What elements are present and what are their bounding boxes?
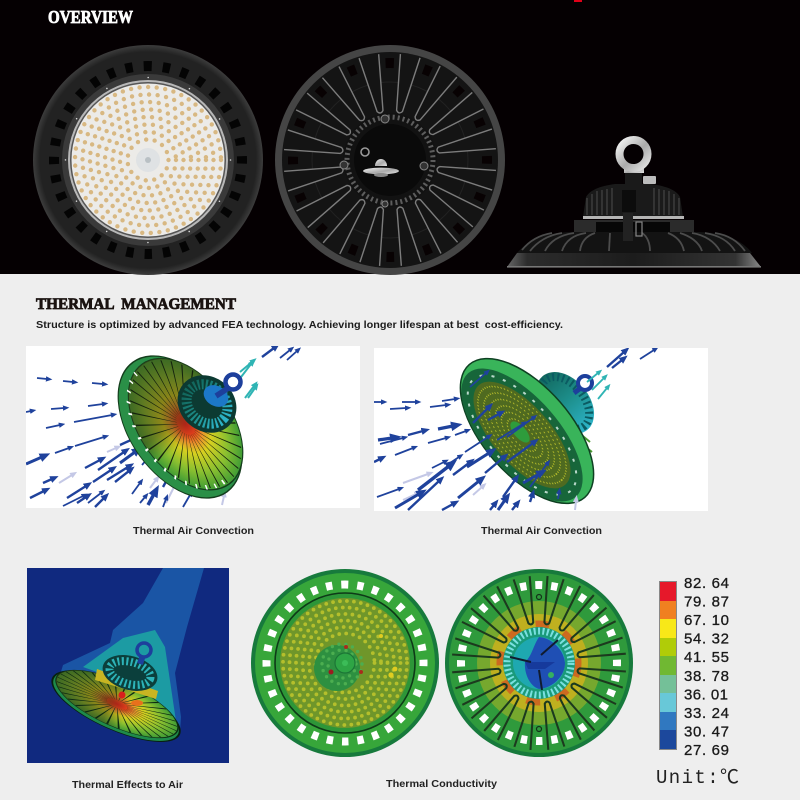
caption: thermal conductivity: Thermal Conductivity — [386, 778, 497, 790]
product photo: lamp side view with lifting ring — [507, 140, 761, 268]
legend values: 30. 47 — [684, 724, 729, 740]
legend values: 38. 78 — [684, 668, 729, 685]
panel: black overview band — [0, 0, 800, 274]
panel: thermal air convection, underside — [374, 348, 708, 511]
legend values: 54. 32 — [684, 630, 729, 648]
text block: thermal management description: Structure is optimized by advanced FEA technology. Achieving longer lifespan at best cost-efficiency. — [36, 319, 563, 331]
lamp thermal model in air — [43, 643, 189, 756]
legend: temperature colour scale — [659, 575, 729, 759]
caption: thermal air convection, underside: Thermal Air Convection — [481, 525, 602, 537]
legend values: 27. 69 — [684, 742, 729, 759]
thermal conductivity: heat-sink side — [445, 569, 633, 757]
legend values: 33. 24 — [684, 705, 729, 722]
legend values: 36. 01 — [684, 686, 728, 704]
legend values: 67. 10 — [684, 612, 729, 629]
caption: thermal air convection, top side: Thermal Air Convection — [133, 525, 254, 537]
legend values: 41. 55 — [684, 649, 729, 666]
lamp thermal model, underside — [436, 336, 618, 526]
product photo: lamp front with LEDs — [33, 45, 263, 275]
airflow arrows, underside — [374, 350, 654, 510]
product photo: lamp back with heat-sink fins — [275, 45, 505, 275]
heading: thermal management: THERMAL MANAGEMENT — [36, 296, 237, 313]
thermal conductivity: LED side — [251, 569, 439, 757]
lamp thermal model, top side — [93, 332, 269, 521]
caption: thermal effects to air: Thermal Effects to Air — [72, 779, 183, 791]
legend values: 79. 87 — [684, 594, 729, 610]
airflow arrows, top side — [26, 348, 297, 507]
legend: unit: Unit:℃ — [656, 767, 739, 789]
panel: thermal effects to air — [27, 568, 229, 763]
heading: overview: OVERVIEW — [48, 7, 133, 27]
legend values — [684, 575, 729, 759]
legend values: 82. 64 — [684, 575, 729, 592]
panel: thermal air convection, top side — [26, 346, 360, 508]
